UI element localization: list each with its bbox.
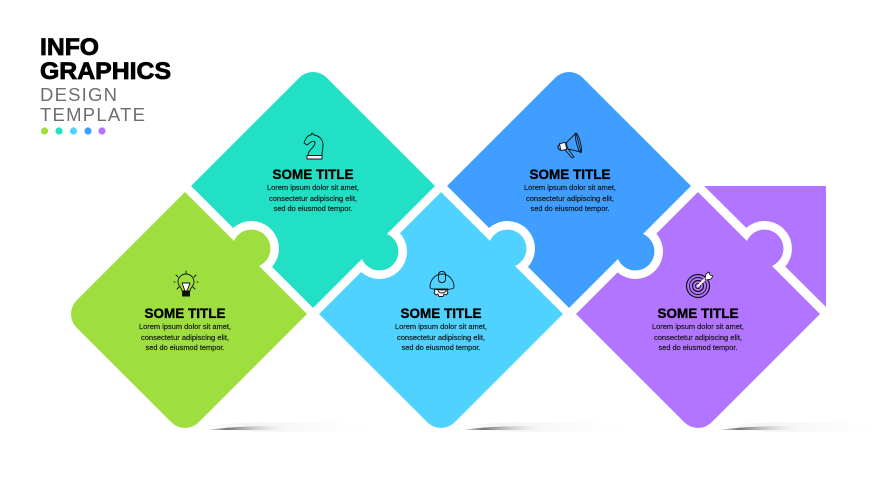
blue puzzle shape: [447, 72, 691, 308]
text block: Lorem ipsum dolor sit amet,: [139, 322, 231, 331]
title: [40, 34, 171, 125]
panel: purple step: [576, 192, 820, 428]
teal puzzle shape: [191, 72, 435, 308]
green puzzle shape: [71, 192, 307, 428]
icon: light bulb: [174, 271, 198, 296]
text block: consectetur adipiscing elit,: [269, 194, 357, 203]
text block: consectetur adipiscing elit,: [654, 333, 742, 342]
heading: SOME TITLE: [658, 305, 738, 321]
shadow under light blue piece: [462, 422, 634, 432]
text block: sed do eiusmod tempor.: [530, 204, 610, 213]
light blue puzzle shape: [319, 192, 563, 428]
title: INFO: [40, 34, 99, 61]
panel: light blue step: [319, 192, 563, 428]
text block: sed do eiusmod tempor.: [274, 204, 352, 213]
heading: SOME TITLE: [530, 166, 610, 182]
heading: SOME TITLE: [272, 166, 354, 182]
icon: target with dart: [686, 272, 713, 298]
shadow under green piece: [206, 422, 378, 432]
heading: SOME TITLE: [144, 305, 226, 321]
purple puzzle shape: [576, 192, 820, 428]
text block: [267, 183, 359, 213]
text block: consectetur adipiscing elit,: [141, 333, 229, 342]
arrow head piece: [704, 186, 826, 307]
text block: sed do eiusmod tempor.: [658, 343, 738, 352]
icon: helmet with gear: [430, 272, 454, 296]
text block: [652, 322, 744, 352]
panel: green step: [71, 192, 307, 428]
text block: sed do eiusmod tempor.: [146, 343, 224, 352]
text block: consectetur adipiscing elit,: [397, 333, 485, 342]
title: TEMPLATE: [40, 104, 145, 125]
text block: consectetur adipiscing elit,: [526, 194, 614, 203]
icon: chess knight: [304, 133, 323, 159]
text block: sed do eiusmod tempor.: [402, 343, 480, 352]
text block: [395, 322, 487, 352]
text block: [139, 322, 231, 352]
panel: teal step: [191, 72, 435, 308]
shadow under purple piece: [720, 422, 884, 432]
panel: blue step: [447, 72, 691, 308]
title: DESIGN: [40, 84, 117, 105]
text block: Lorem ipsum dolor sit amet,: [267, 183, 359, 192]
text block: [524, 183, 616, 213]
text block: Lorem ipsum dolor sit amet,: [524, 183, 616, 192]
text block: Lorem ipsum dolor sit amet,: [395, 322, 487, 331]
icon: megaphone: [558, 133, 583, 158]
heading: SOME TITLE: [400, 305, 482, 321]
colour dots: [41, 127, 106, 135]
title: GRAPHICS: [40, 58, 171, 85]
text block: Lorem ipsum dolor sit amet,: [652, 322, 744, 331]
